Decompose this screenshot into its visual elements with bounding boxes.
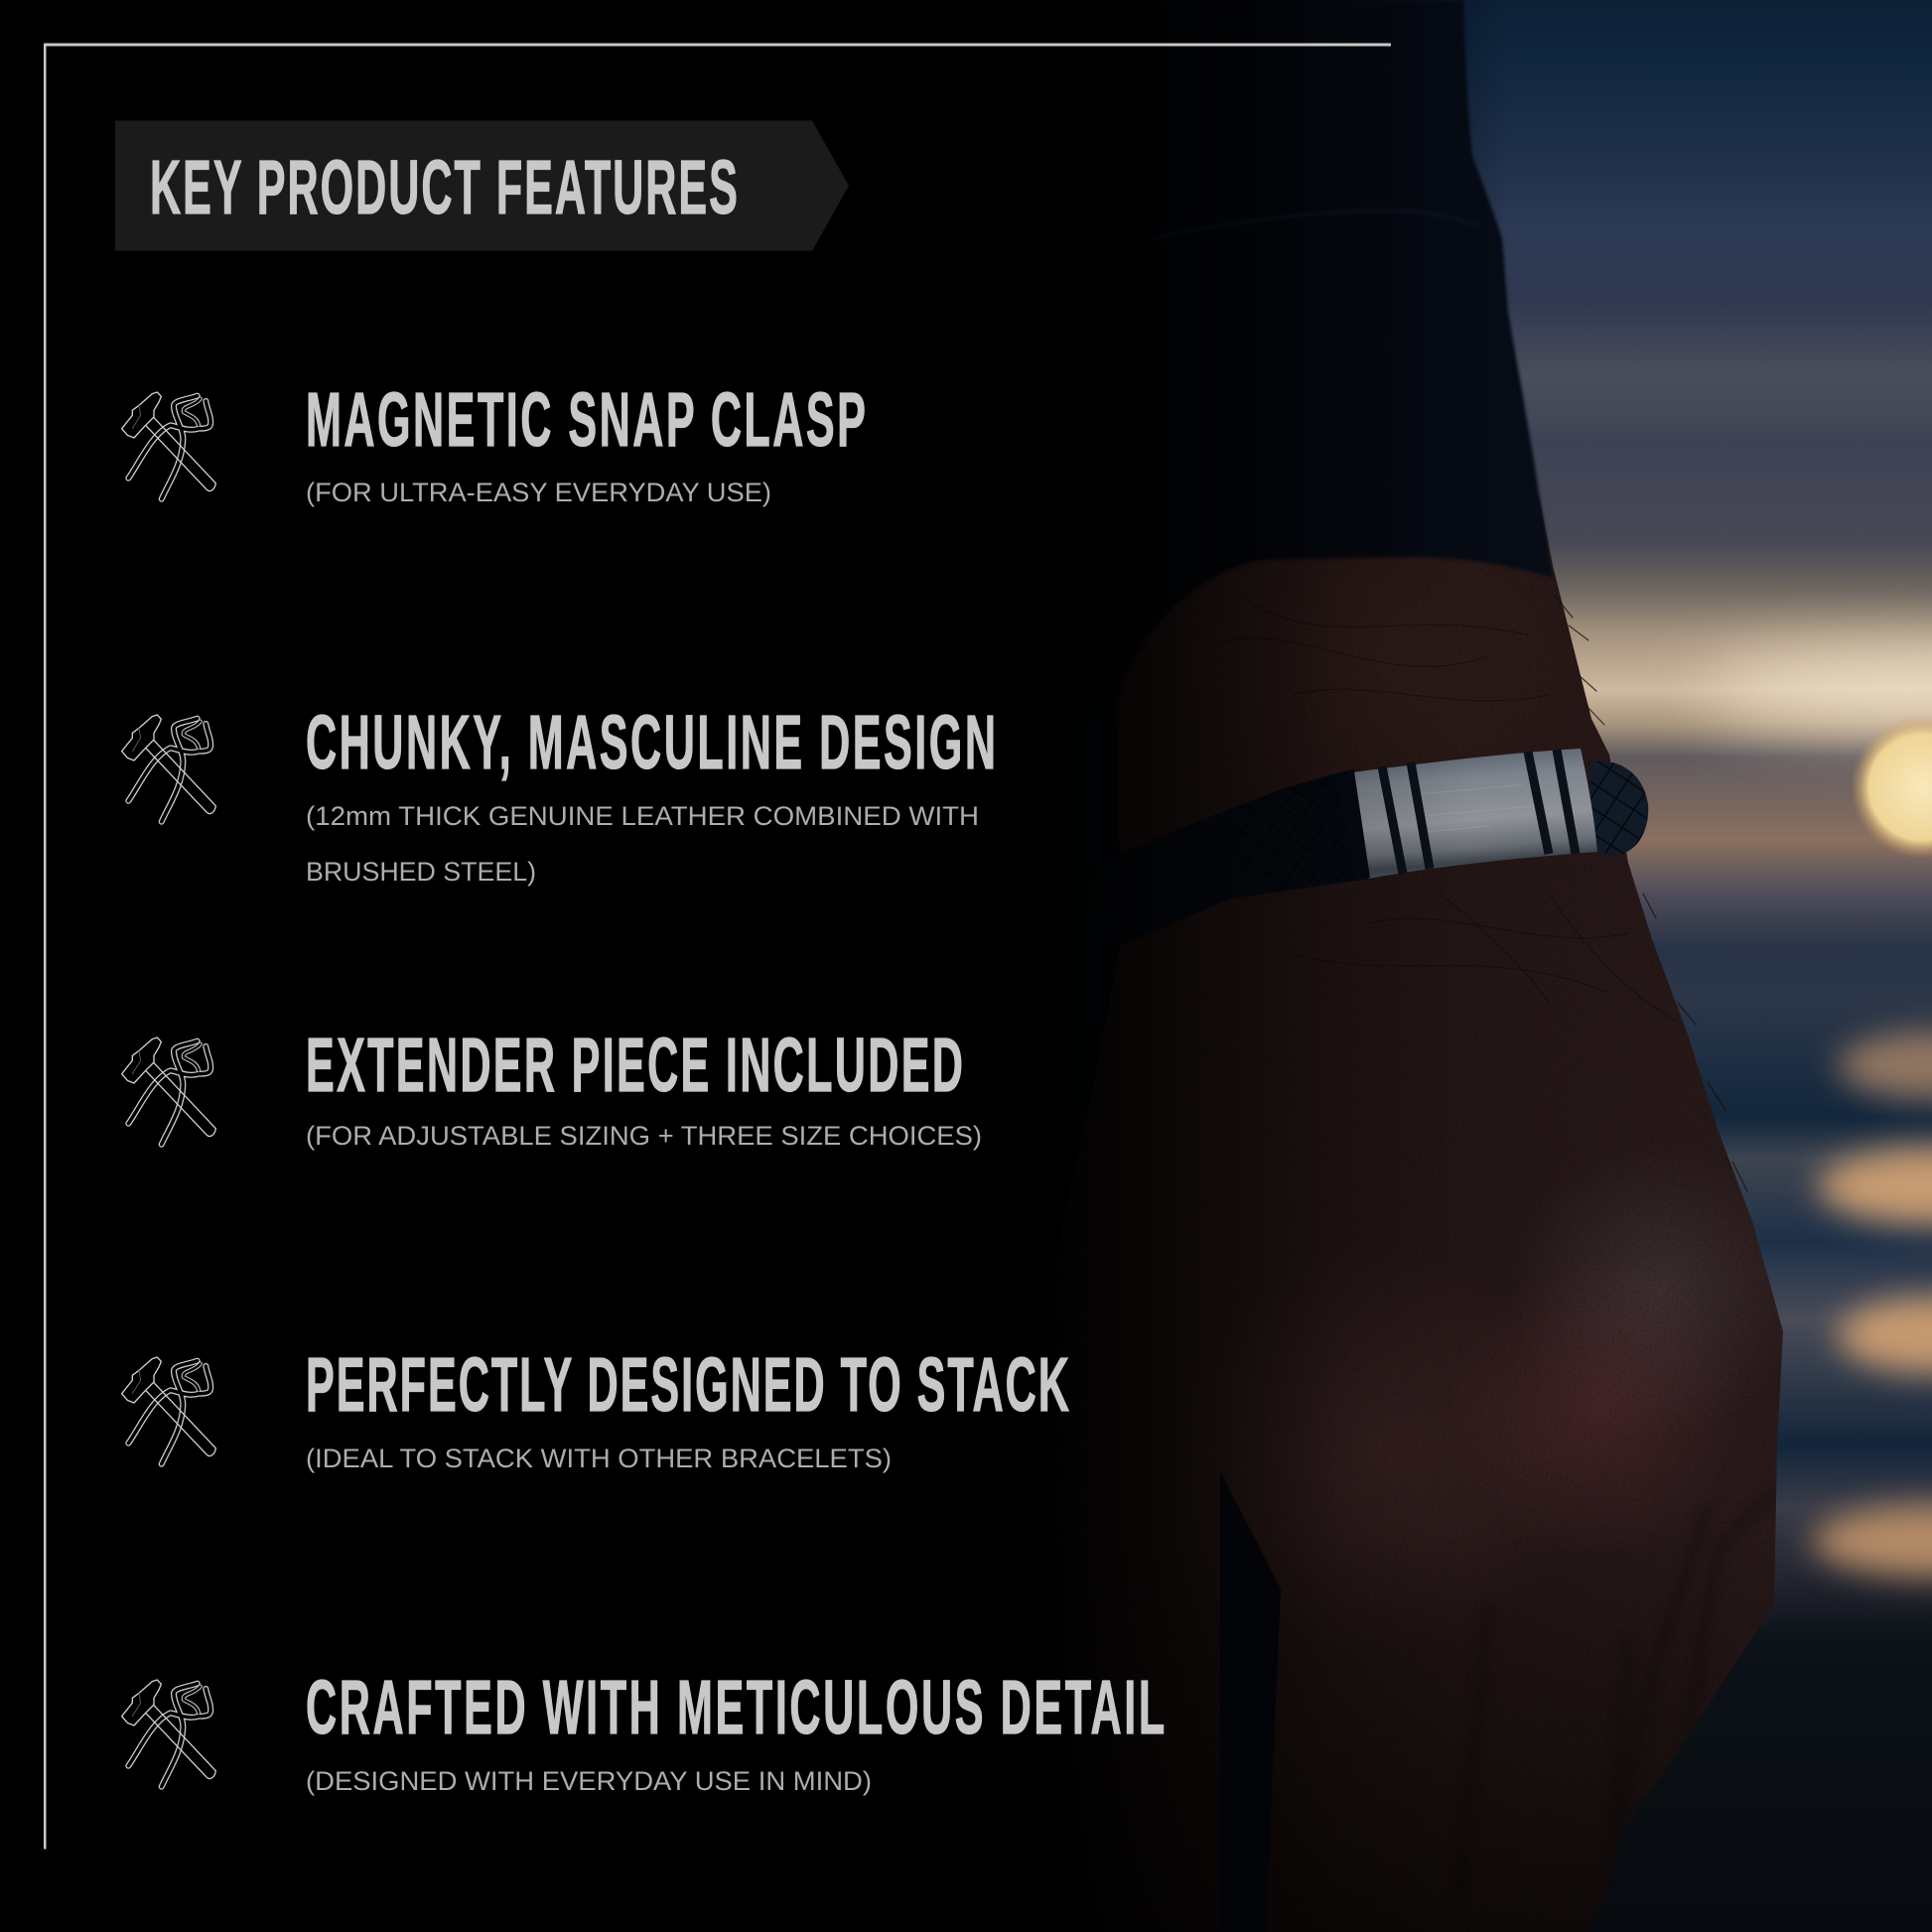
feature note: (IDEAL TO STACK WITH OTHER BRACELETS): [306, 1444, 892, 1473]
feature title: CHUNKY, MASCULINE DESIGN: [306, 701, 996, 785]
feature 3: [122, 1024, 982, 1151]
header banner: [115, 121, 849, 250]
feature 5: [122, 1666, 1165, 1796]
feature title: CRAFTED WITH METICULOUS DETAIL: [306, 1666, 1165, 1750]
feature note: (FOR ULTRA-EASY EVERYDAY USE): [306, 478, 771, 507]
leather band left: [1089, 769, 1370, 945]
icon: hammer and pincers: [122, 392, 215, 499]
icon: hammer and pincers: [122, 1357, 215, 1464]
shirt cuff: [894, 0, 1553, 707]
feature note: (DESIGNED WITH EVERYDAY USE IN MIND): [306, 1766, 872, 1796]
feature note: BRUSHED STEEL): [306, 857, 536, 887]
feature note: (12mm THICK GENUINE LEATHER COMBINED WITH: [306, 801, 979, 831]
feature note: [306, 801, 979, 887]
photo background: sunset sky and water: [993, 0, 1932, 1932]
feature 4: [122, 1343, 1069, 1473]
frame lines: [44, 44, 1391, 1849]
feature 1: [122, 378, 866, 507]
feature title: PERFECTLY DESIGNED TO STACK: [306, 1343, 1069, 1428]
icon: hammer and pincers: [122, 715, 215, 822]
icon: hammer and pincers: [122, 1037, 215, 1145]
feature note: (FOR ADJUSTABLE SIZING + THREE SIZE CHOICES): [306, 1121, 982, 1151]
arm hairs: [1555, 596, 1747, 1191]
dark gradient overlay behind text: [943, 0, 1469, 1932]
steel clasp: [1352, 749, 1597, 879]
heading: KEY PRODUCT FEATURES: [150, 146, 738, 230]
feature 2: [122, 701, 996, 887]
bracelet: [1089, 749, 1648, 945]
clasp shoulder: [1336, 771, 1370, 882]
feature title: EXTENDER PIECE INCLUDED: [306, 1024, 963, 1108]
icon: hammer and pincers: [122, 1680, 215, 1787]
feature title: MAGNETIC SNAP CLASP: [306, 378, 866, 463]
sun: [1851, 716, 1932, 859]
leather band right: [1588, 761, 1648, 856]
hand and wrist: [1130, 496, 1783, 1932]
